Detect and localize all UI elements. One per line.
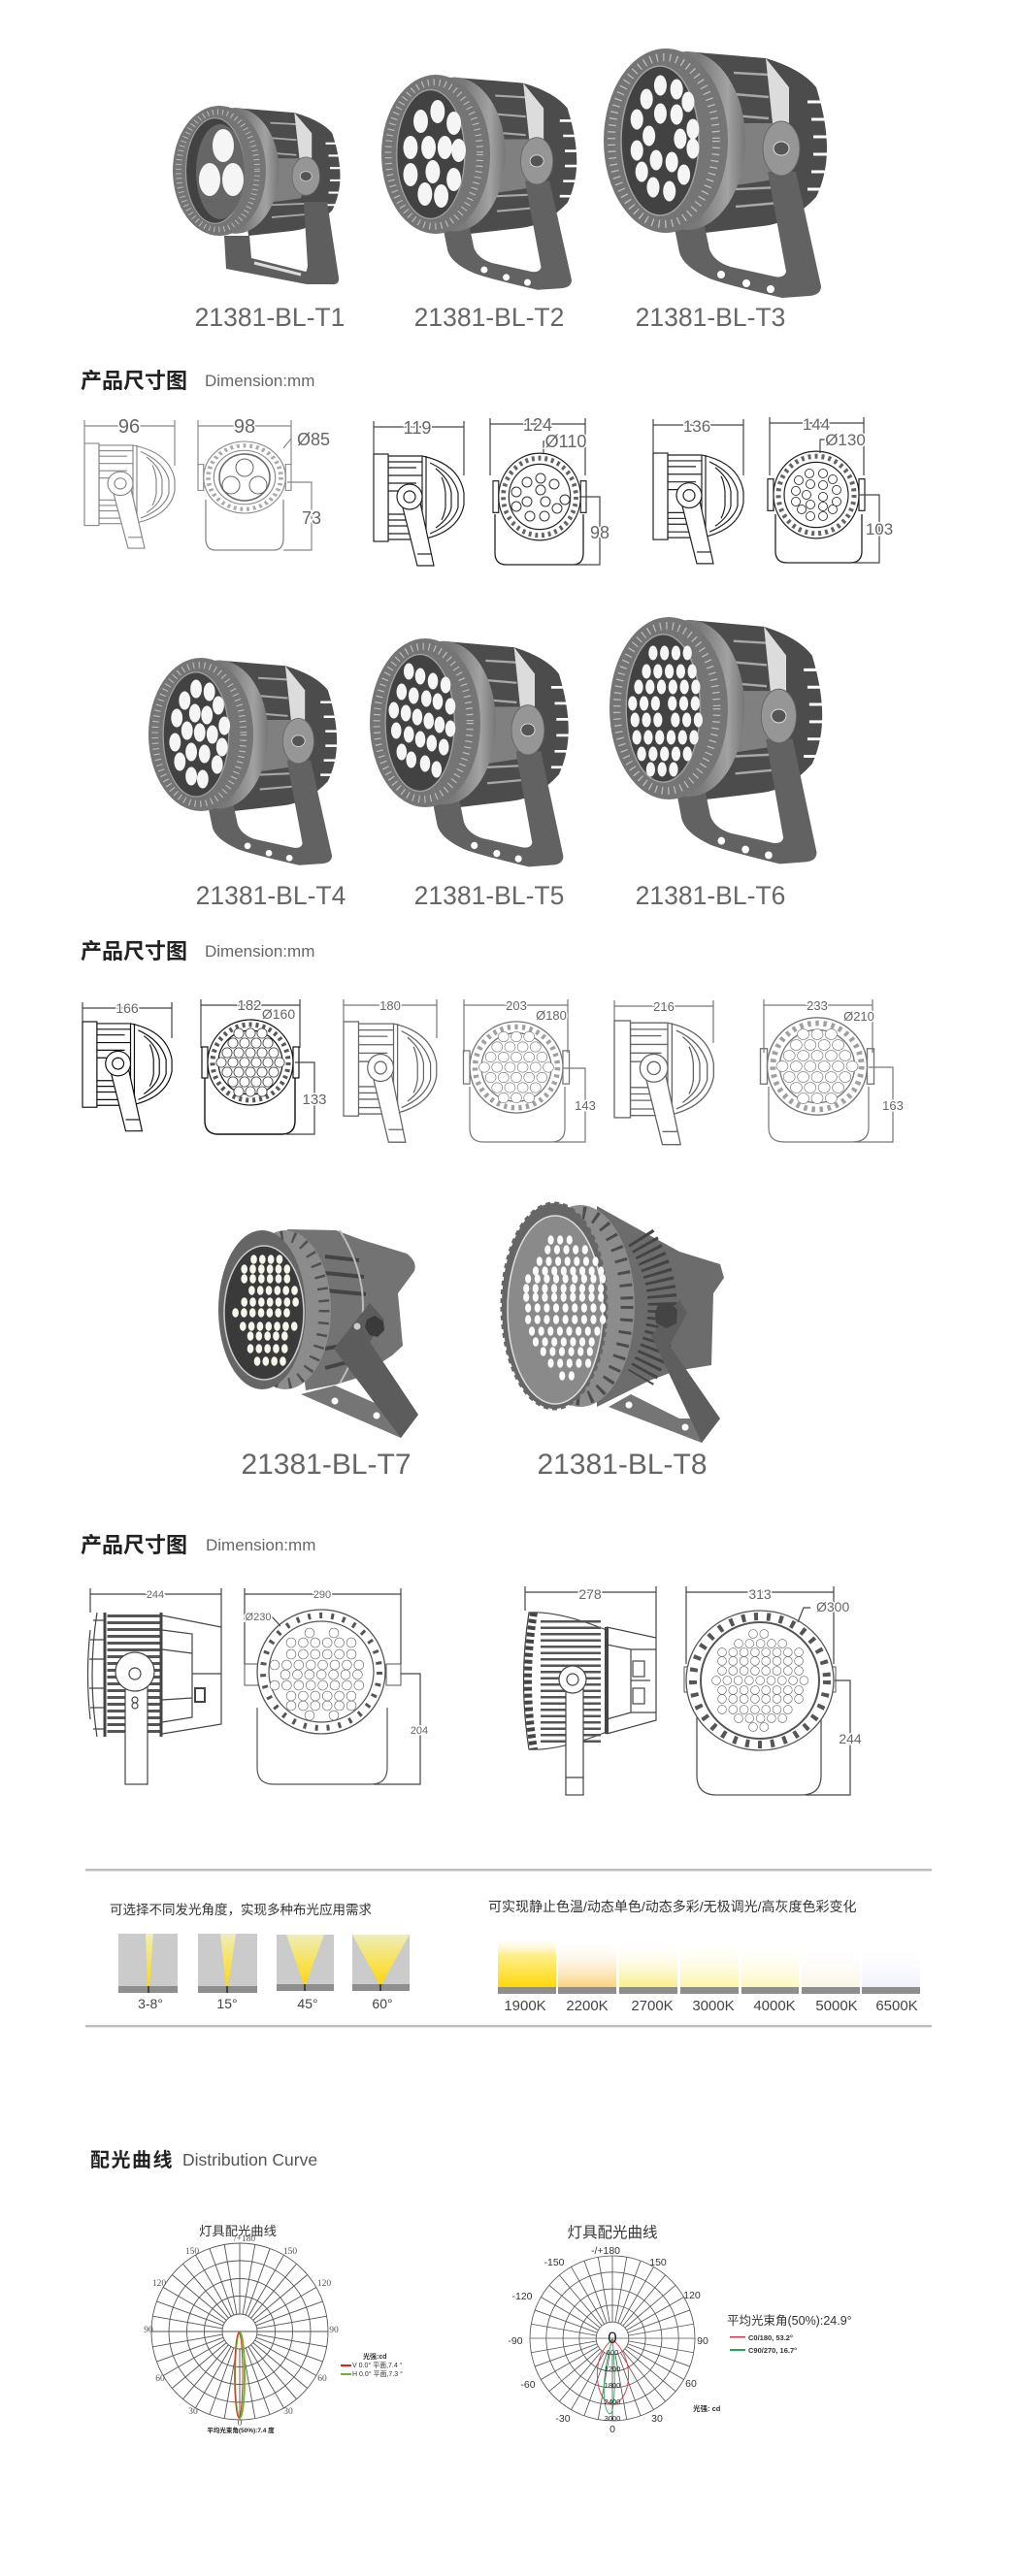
chart: polar curve two: -90 — [508, 2335, 523, 2347]
chart: polar curve two: 3000 — [605, 2414, 620, 2423]
icon: beam 45 degrees — [277, 1935, 334, 2011]
drawing: T4 front: 182 — [237, 997, 262, 1014]
drawing: T6 side — [614, 999, 713, 1145]
drawing: T4 front: 133 — [302, 1092, 327, 1108]
subheading: distribution curve: Distribution Curve — [182, 2150, 317, 2169]
drawing: T3 front: 144 — [803, 415, 830, 434]
drawing: T3 front — [768, 415, 893, 563]
subheading: unit: Dimension:mm — [206, 1536, 315, 1554]
lamp: T5 — [370, 638, 582, 866]
swatch: 5000K: 5000K — [815, 1998, 858, 2014]
lamp: T6 — [609, 617, 837, 864]
drawing: T7 side — [87, 1588, 221, 1784]
drawing: T6 front — [761, 998, 904, 1142]
drawing: T8 front: 244 — [839, 1731, 862, 1746]
chart: polar curve one: 120 — [152, 2279, 166, 2289]
label: T2: 21381-BL-T2 — [414, 303, 564, 332]
drawing: T3 front: 103 — [866, 520, 893, 538]
icon: beam 3-8 degrees: 3-8° — [138, 1996, 163, 2011]
chart: polar curve two: -120 — [511, 2291, 533, 2302]
label: T4: 21381-BL-T4 — [196, 881, 346, 910]
heading: distribution curve: 配光曲线 — [90, 2149, 174, 2171]
chart: polar curve two: 0 — [608, 2329, 617, 2347]
drawing: T6 front: 233 — [807, 998, 828, 1013]
drawing: T7 front: Ø230 — [246, 1612, 271, 1623]
drawing: T7 side: 244 — [147, 1589, 164, 1601]
drawing: T5 front: Ø180 — [536, 1008, 567, 1023]
drawing: T3 side: 136 — [683, 417, 710, 436]
heading: dimensions: 产品尺寸图 — [81, 369, 187, 393]
drawing: T5 front — [464, 998, 596, 1142]
drawing: T1 side: 96 — [118, 416, 140, 438]
label: T8: 21381-BL-T8 — [537, 1449, 708, 1481]
icon: beam 15 degrees — [198, 1934, 257, 2011]
swatch: 1900K — [498, 1937, 556, 2014]
swatch: 1900K: 1900K — [504, 1998, 546, 2014]
chart: polar curve two: -30 — [555, 2413, 571, 2425]
swatch: 4000K — [741, 1940, 799, 2014]
drawing: T4 front: Ø160 — [262, 1006, 295, 1022]
lamp: T3 — [604, 49, 842, 298]
chart: polar curve two: 1200 — [605, 2364, 620, 2373]
chart: polar curve one: 平均光束角(50%):7.4 度 — [207, 2426, 275, 2434]
swatch: 4000K: 4000K — [753, 1998, 796, 2014]
swatch: 6500K — [862, 1944, 920, 2014]
chart: polar curve two: 1800 — [605, 2381, 620, 2390]
panel: dimensions T7 and T8 — [81, 1533, 862, 1795]
drawing: T7 front: 290 — [313, 1589, 331, 1601]
drawing: T2 front — [490, 415, 609, 565]
legend: polar curve two: 平均光束角(50%):24.9° — [727, 2314, 852, 2328]
label: T6: 21381-BL-T6 — [636, 881, 785, 910]
chart: polar curve one: 60 — [155, 2374, 165, 2384]
drawing: T3 front: Ø130 — [825, 431, 866, 449]
chart: polar curve two: 0 — [609, 2424, 615, 2435]
drawing: T2 front: 124 — [523, 415, 552, 435]
swatch: 3000K: 3000K — [692, 1998, 735, 2014]
chart: polar curve one: 60 — [317, 2374, 327, 2384]
legend: polar curve one: H 0.0° 平面,7.3 ° — [352, 2370, 403, 2378]
chart: polar curve one: 120 — [317, 2279, 331, 2289]
icon: beam 60 degrees — [352, 1935, 410, 2011]
chart: polar curve one: 90 — [329, 2326, 339, 2335]
swatch: 2700K: 2700K — [631, 1998, 674, 2014]
drawing: T5 front: 203 — [506, 998, 527, 1013]
drawing: T1 front: 73 — [302, 508, 321, 528]
chart: polar curve two: -150 — [543, 2257, 565, 2268]
drawing: T5 side: 180 — [379, 998, 401, 1013]
legend: polar curve one — [341, 2352, 403, 2378]
text: colour control note: 可实现静止色温/动态单色/动态多彩/无极调光/高灰度色彩变化 — [488, 1899, 857, 1914]
product row: T4 to T6 — [148, 617, 837, 910]
swatch: 2200K: 2200K — [566, 1998, 609, 2014]
lamp: T2 — [381, 75, 590, 290]
swatch: 5000K — [802, 1942, 860, 2014]
drawing: T6 front: Ø210 — [843, 1009, 874, 1024]
drawing: T3 side — [653, 417, 743, 564]
chart: polar curve two: 30 — [651, 2413, 663, 2425]
drawing: T8 front: 313 — [748, 1586, 772, 1602]
lamp: T4 — [148, 658, 350, 865]
chart: polar curve one: 150 — [185, 2247, 199, 2257]
product row: T7 and T8 — [218, 1203, 724, 1481]
chart: polar curve one: 30 — [188, 2407, 198, 2417]
icon: beam 45 degrees: 45° — [297, 1996, 318, 2011]
icon: beam 3-8 degrees — [118, 1934, 178, 2011]
drawing: T1 front: Ø85 — [297, 430, 330, 449]
chart: polar curve two: 600 — [607, 2348, 618, 2357]
product row: T1 to T3 — [173, 49, 842, 332]
chart: polar curve one: 90 — [144, 2326, 153, 2335]
heading: dimensions: 产品尺寸图 — [81, 939, 187, 963]
panel: beam angles and colour temperature — [85, 1869, 932, 2028]
icon: beam 60 degrees: 60° — [372, 1996, 393, 2011]
lamp: T1 — [173, 106, 351, 284]
swatch: 2200K — [558, 1939, 616, 2014]
drawing: T8 front — [684, 1586, 862, 1795]
text: beam angle note: 可选择不同发光角度，实现多种布光应用需求 — [110, 1902, 372, 1917]
drawing: T8 front: Ø300 — [816, 1599, 849, 1614]
chart: polar curve two: 90 — [697, 2335, 708, 2347]
swatch: 3000K — [680, 1939, 739, 2014]
drawing: T2 side: 119 — [404, 418, 431, 438]
swatch: 2700K — [619, 1939, 677, 2014]
chart: polar curve one: /+180 — [234, 2234, 255, 2244]
chart: polar curve two: -60 — [520, 2379, 536, 2391]
chart: polar curve one: 150 — [283, 2247, 297, 2257]
drawing: T6 front: 163 — [882, 1098, 904, 1113]
legend: polar curve two: 光强: cd — [693, 2403, 721, 2413]
chart: polar curve two: -/+180 — [591, 2245, 620, 2257]
drawing: T7 front: 204 — [411, 1725, 428, 1737]
drawing: T4 front — [201, 997, 327, 1134]
heading: dimensions: 产品尺寸图 — [81, 1533, 187, 1557]
drawing: T8 side — [524, 1586, 656, 1795]
drawing: T7 front — [245, 1588, 428, 1784]
drawing: T8 side: 278 — [578, 1586, 602, 1602]
subheading: unit: Dimension:mm — [205, 372, 314, 390]
legend: polar curve two: C90/270, 16.7° — [748, 2346, 797, 2355]
label: T5: 21381-BL-T5 — [414, 881, 564, 910]
drawing: T2 front: Ø110 — [545, 432, 586, 451]
drawing: T1 side — [84, 416, 175, 548]
drawing: T2 side — [374, 418, 464, 566]
chart: polar curve two: 2400 — [605, 2397, 620, 2406]
panel: distribution curves — [90, 2149, 852, 2435]
chart: polar curve one: 灯具配光曲线 — [199, 2224, 277, 2238]
label: T1: 21381-BL-T1 — [195, 303, 345, 332]
drawing: T4 side — [82, 1000, 172, 1131]
legend: polar curve one: 光强:cd — [363, 2352, 386, 2361]
drawing: T5 front: 143 — [575, 1098, 596, 1113]
lamp: T7 — [218, 1229, 418, 1438]
chart: polar curve two: 150 — [649, 2257, 667, 2268]
panel: dimensions T4 to T6 — [81, 939, 904, 1145]
drawing: T2 front: 98 — [590, 523, 609, 542]
legend: polar curve two — [693, 2314, 852, 2413]
drawing: T1 front: 98 — [234, 416, 255, 438]
chart: polar curve one — [144, 2224, 339, 2434]
drawing: T4 side: 166 — [115, 1000, 139, 1016]
label: T3: 21381-BL-T3 — [636, 303, 785, 332]
chart: polar curve one: 0 — [238, 2419, 243, 2429]
drawing: T1 front — [198, 416, 330, 550]
chart: polar curve two: 60 — [685, 2378, 697, 2390]
drawing: T5 side — [344, 998, 437, 1142]
subheading: unit: Dimension:mm — [205, 942, 314, 961]
chart: polar curve one: 30 — [283, 2407, 293, 2417]
label: T7: 21381-BL-T7 — [241, 1449, 412, 1481]
chart: polar curve two: 灯具配光曲线 — [567, 2224, 658, 2241]
lamp: T8 — [502, 1203, 724, 1443]
icon: beam 15 degrees: 15° — [216, 1996, 238, 2011]
swatch: 6500K: 6500K — [875, 1998, 918, 2014]
drawing: T6 side: 216 — [653, 999, 675, 1014]
panel: dimensions T1 to T3 — [81, 369, 893, 566]
chart: polar curve two: 120 — [683, 2290, 701, 2301]
chart: polar curve two — [508, 2224, 708, 2435]
legend: polar curve one: V 0.0° 平面,7.4 ° — [352, 2362, 403, 2369]
legend: polar curve two: C0/180, 53.2° — [748, 2333, 793, 2342]
